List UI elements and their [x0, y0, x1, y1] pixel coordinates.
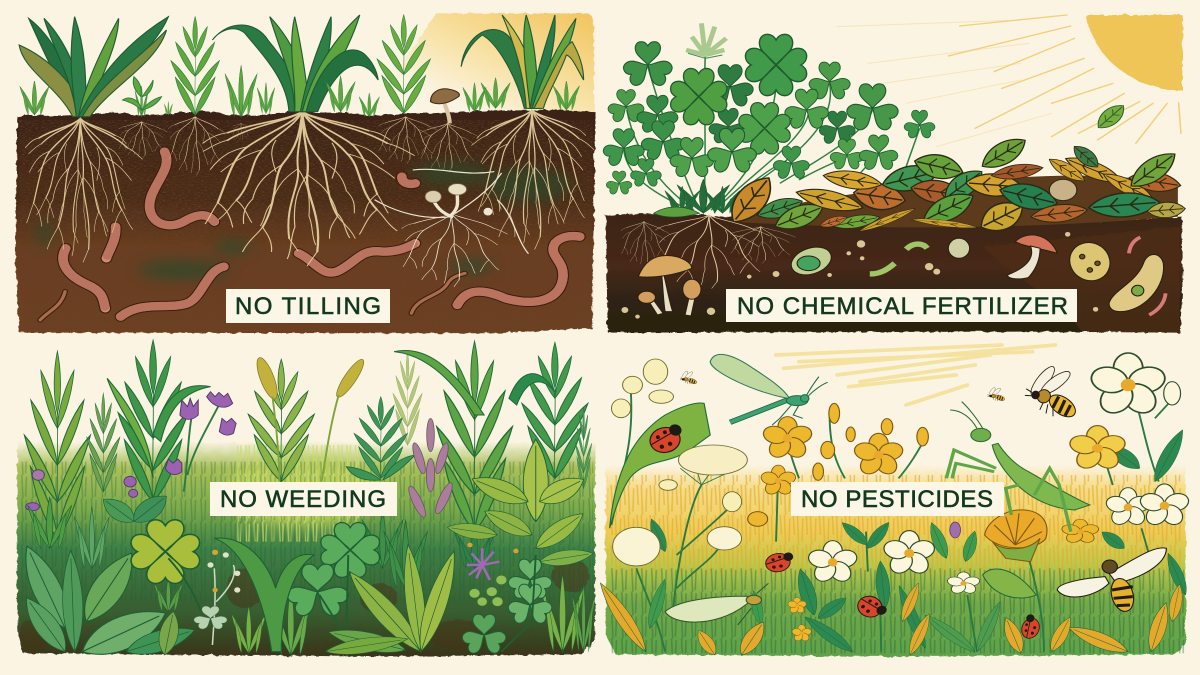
clover base tuft	[654, 179, 742, 217]
mycelium and small mushrooms	[375, 169, 528, 287]
soil specks	[621, 232, 1098, 319]
clover leaves	[601, 34, 936, 195]
label: no weeding: NO WEEDING	[220, 486, 386, 513]
lime grass glow behind label	[222, 458, 383, 525]
soil showing at base	[19, 558, 589, 652]
fungi and microbes	[638, 235, 1166, 316]
falling leaf	[1092, 100, 1130, 133]
soil	[606, 214, 1182, 333]
yellow grass strokes	[608, 475, 1182, 575]
purple flowers	[26, 392, 236, 511]
brown lower right soil	[983, 227, 1180, 333]
purple bud	[950, 522, 961, 538]
broad leaf plants	[14, 439, 595, 666]
clover stems	[624, 57, 920, 210]
illustration: flowers and beneficial insects	[594, 345, 1191, 659]
label: no pesticides: NO PESTICIDES	[801, 486, 993, 513]
leaf mulch pile	[721, 132, 1186, 238]
illustration: clover, sun, leaf mulch and living soil	[601, 15, 1186, 333]
warm sky glow	[367, 13, 594, 115]
stems	[611, 388, 1170, 652]
ladybugs	[645, 421, 1043, 640]
mushroom	[431, 89, 459, 123]
orange calendula	[985, 510, 1047, 562]
label: no tilling: NO TILLING	[235, 293, 381, 320]
illustration: soil cross-section with plants, roots and worms	[15, 13, 595, 333]
yellow buttercups	[748, 403, 1128, 642]
sun haze	[776, 345, 1055, 405]
panel: no weeding	[14, 340, 597, 666]
large plants	[19, 15, 584, 117]
soil moss patches	[36, 161, 570, 281]
meadow background	[17, 442, 595, 657]
medium plants and grass tufts	[18, 15, 581, 118]
lacewing	[665, 583, 768, 625]
lower foliage tufts	[25, 497, 597, 656]
lime grass texture	[237, 445, 360, 542]
panel: no pesticides	[594, 345, 1191, 659]
illustration: dense weeds and wildflowers	[14, 340, 597, 666]
pale flower clusters	[611, 359, 747, 566]
large bee with open wings	[1057, 548, 1166, 613]
tall weed stalks	[21, 340, 593, 541]
grass texture	[19, 462, 593, 602]
soil	[15, 110, 595, 333]
small sprigs and berries	[192, 543, 519, 645]
pink spike plant	[406, 418, 455, 519]
green grass strokes	[608, 568, 1186, 653]
panel: no chemical fertilizer	[601, 15, 1186, 333]
grain heads	[253, 356, 368, 482]
roots in soil	[621, 215, 795, 288]
roots	[25, 110, 594, 266]
soil crayon grain	[19, 120, 593, 328]
panel: no tilling	[15, 13, 595, 333]
worms	[40, 152, 580, 320]
herb plants	[346, 397, 415, 480]
sun rays	[837, 15, 1181, 147]
white flowers	[806, 353, 1191, 595]
damselfly	[710, 354, 828, 425]
clover blossom	[686, 23, 726, 58]
bumble bees	[680, 361, 1087, 422]
label: no chemical fertilizer: NO CHEMICAL FERTILIZER	[737, 293, 1068, 320]
sun	[1086, 15, 1182, 91]
meadow background	[606, 465, 1186, 657]
foliage leaves	[594, 403, 1191, 659]
praying mantis	[946, 402, 1090, 532]
curved blades	[107, 350, 555, 478]
